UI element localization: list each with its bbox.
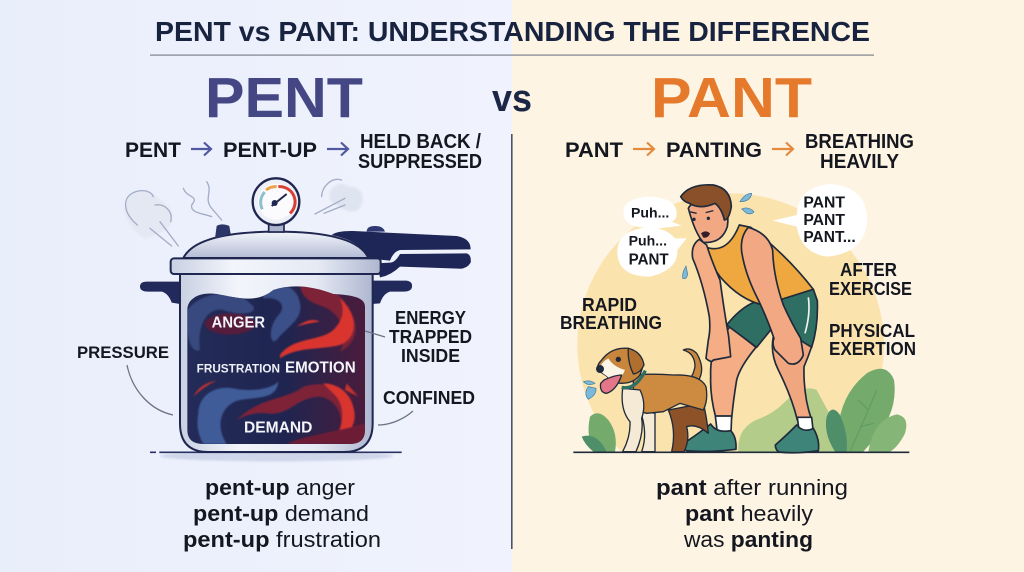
arrow xyxy=(327,142,348,156)
socks xyxy=(715,416,732,433)
swirl shapes xyxy=(187,286,365,444)
examples: pant: pant heavily xyxy=(685,501,813,526)
heading: PANT: PANT xyxy=(651,66,812,130)
ear xyxy=(628,348,644,374)
examples: pent: pent-up frustration xyxy=(183,527,381,552)
swirl label: frustration: FRUSTRATION xyxy=(197,361,280,375)
title: PENT vs PANT: UNDERSTANDING THE DIFFERENCE xyxy=(155,16,870,47)
left shoe xyxy=(683,424,736,451)
flow: pant to breathing heavily xyxy=(565,131,914,173)
swirling emotions xyxy=(187,286,365,444)
center divider xyxy=(511,134,513,549)
speech bubble: pant pant pant: PANT... xyxy=(803,229,856,246)
label: rapid breathing: RAPID xyxy=(582,295,637,315)
flow word: suppressed: SUPPRESSED xyxy=(358,151,482,173)
label: confined xyxy=(378,388,475,425)
arrow xyxy=(191,142,211,156)
lid rim xyxy=(171,258,381,274)
arrow xyxy=(772,142,793,156)
arrow xyxy=(633,142,654,156)
flow word: PANT: PANT xyxy=(565,139,623,162)
pot body xyxy=(180,274,373,452)
label: rapid breathing: BREATHING xyxy=(560,313,662,333)
tank top xyxy=(703,225,813,305)
flow word: PENT: PENT xyxy=(125,139,181,162)
examples: pant xyxy=(656,475,848,552)
label: energy trapped inside: ENERGY xyxy=(395,308,466,328)
label: energy trapped inside: TRAPPED xyxy=(389,327,472,347)
nose and eye xyxy=(597,366,603,372)
ground shadow xyxy=(160,451,393,461)
steam puff right xyxy=(315,179,363,214)
label: physical exertion: PHYSICAL xyxy=(829,321,915,341)
ground line xyxy=(150,450,402,455)
hair xyxy=(681,185,731,220)
flow word: held back: HELD BACK / xyxy=(360,131,481,153)
speech bubble: puh xyxy=(623,197,682,229)
panel: pant background xyxy=(512,0,1024,572)
examples: pant: was panting xyxy=(683,527,813,552)
flow word: PENT-UP: PENT-UP xyxy=(223,139,317,162)
man xyxy=(681,185,819,453)
speech bubble: pant pant pant: PANT xyxy=(803,195,845,212)
speech bubble: puh pant: Puh... xyxy=(629,233,667,249)
heading: PENT: PENT xyxy=(205,66,363,130)
head xyxy=(597,348,643,383)
label: after exercise: AFTER xyxy=(840,260,897,280)
steam wisp xyxy=(183,182,222,220)
swirl label: demand: DEMAND xyxy=(244,420,312,437)
examples: pent xyxy=(183,475,381,552)
examples: pent: pent-up demand xyxy=(193,501,369,526)
bushes xyxy=(582,369,906,452)
label: pressure: PRESSURE xyxy=(77,343,169,362)
collar xyxy=(622,371,645,388)
title rule xyxy=(150,54,874,56)
examples: pant: pant after running xyxy=(656,475,848,500)
speech bubble: puh pant xyxy=(617,228,687,277)
label: pressure xyxy=(77,343,173,415)
label: physical exertion xyxy=(829,321,916,359)
swirl label: emotion: EMOTION xyxy=(285,360,356,377)
right shoe xyxy=(775,425,819,453)
label: after exercise: EXERCISE xyxy=(829,279,912,299)
left leg xyxy=(711,327,756,418)
tail xyxy=(683,349,702,383)
front arm xyxy=(692,239,731,361)
sun backdrop xyxy=(577,193,884,452)
label: physical exertion: EXERTION xyxy=(829,339,916,359)
illustration: panting runner and dog xyxy=(573,184,910,454)
heading: vs: vs xyxy=(492,78,532,120)
liquid base xyxy=(187,286,365,444)
back arm xyxy=(741,227,803,364)
speech bubble: puh pant: PANT xyxy=(629,251,669,268)
swirl label: anger: ANGER xyxy=(212,315,265,332)
back leg xyxy=(668,403,708,452)
pressure gauge xyxy=(253,178,299,232)
speech bubble: puh: Puh... xyxy=(631,205,669,221)
ground line xyxy=(573,450,909,455)
label: rapid breathing xyxy=(560,295,662,333)
panel: pent background xyxy=(0,0,512,572)
flow word: PANTING: PANTING xyxy=(666,139,762,162)
flow: pent to held back xyxy=(125,131,482,173)
long lid handle xyxy=(332,226,471,277)
shorts xyxy=(727,289,817,347)
lid knob xyxy=(215,224,231,238)
lid dome xyxy=(183,232,368,258)
examples: pent: pent-up anger xyxy=(205,475,355,500)
label: after exercise xyxy=(829,260,912,299)
sweat drops xyxy=(583,193,754,399)
tongue xyxy=(600,375,622,393)
body xyxy=(633,374,707,413)
head xyxy=(688,200,728,242)
illustration: pressure cooker xyxy=(124,178,471,461)
steam puff left xyxy=(124,191,178,246)
face xyxy=(689,211,713,238)
label: energy trapped inside xyxy=(365,308,472,366)
far front leg xyxy=(640,410,655,452)
right leg xyxy=(772,330,812,420)
flow word: breathing: BREATHING xyxy=(805,131,914,153)
side handles xyxy=(140,282,180,304)
label: confined: CONFINED xyxy=(383,388,475,408)
chest and front leg xyxy=(622,388,644,452)
label: energy trapped inside: INSIDE xyxy=(401,346,460,366)
speech bubble: pant pant pant: PANT xyxy=(803,212,845,229)
flow word: heavily: HEAVILY xyxy=(820,151,900,173)
dog xyxy=(597,348,708,452)
speech bubble: pant pant pant xyxy=(773,184,867,257)
